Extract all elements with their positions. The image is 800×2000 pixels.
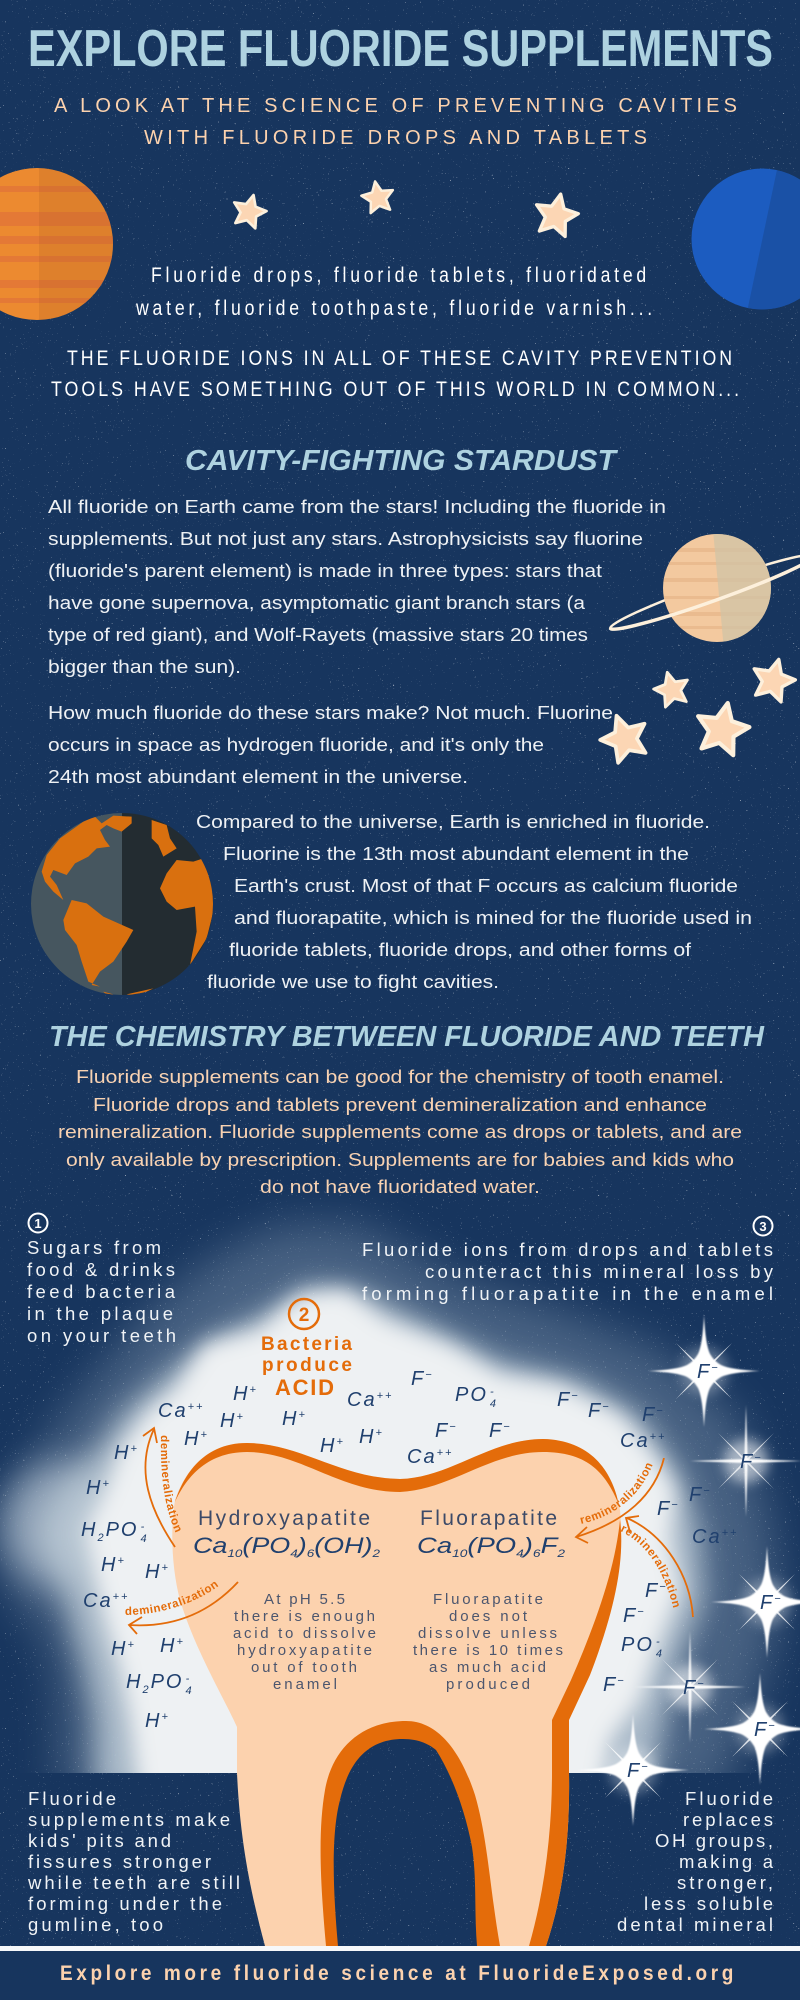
bottom right note: less soluble [644, 1893, 773, 1914]
bottom right note: stronger, [677, 1872, 773, 1893]
text block: how much fluoride [48, 702, 613, 787]
step 3: 3 [759, 1219, 767, 1234]
text block: chemistry: Fluoride supplements can be good for the chemistry of tooth enamel. [76, 1066, 724, 1087]
fluoride ions: F [642, 1404, 656, 1426]
acid ions: - [186, 1673, 191, 1685]
footer: Explore more fluoride science at FluorideExposed.org [60, 1962, 737, 1985]
acid ions: + [127, 1639, 136, 1651]
acid ions: H [320, 1435, 336, 1457]
fluoride ions: ++ [722, 1527, 738, 1539]
text block: chemistry: remineralization. Fluoride supplements come as drops or tablets, and are [58, 1121, 742, 1142]
fluoride ions: − [425, 1369, 434, 1381]
fluoride ions: F [623, 1605, 637, 1627]
acid ions: + [161, 1562, 170, 1574]
fluoride ions: PO [455, 1384, 488, 1406]
text block: stars: All fluoride on Earth came from the stars! Including the fluoride in [48, 496, 666, 517]
hydroxyapatite label [193, 1507, 380, 1560]
text block: earth: Compared to the universe, Earth is enriched in fluoride. [196, 811, 710, 832]
fluoride ions: Ca [407, 1446, 437, 1468]
sparkle stars: − [641, 1761, 650, 1773]
fluoride ions: ++ [437, 1447, 453, 1459]
hydroxyapatite label: (PO [242, 1533, 290, 1558]
step 2: 2 [299, 1305, 309, 1326]
step 2: Bacteria [261, 1334, 352, 1355]
fluoride ions: F [645, 1580, 659, 1602]
fluoride ions: − [571, 1390, 580, 1402]
hydroxyapatite label: ) [294, 1533, 307, 1558]
icon: three stars [229, 179, 581, 238]
fluoride ions: − [659, 1581, 668, 1593]
sparkle stars: F [740, 1451, 754, 1473]
sparkle stars: − [711, 1362, 720, 1374]
arrow: remineralization upper [574, 1458, 665, 1544]
acid ions: ++ [113, 1591, 129, 1603]
fluorapatite note: dissolve unless [418, 1625, 557, 1642]
fluoride ions: − [602, 1401, 611, 1413]
text block: stars: type of red giant), and Wolf-Rayets (massive stars 20 times [48, 624, 588, 645]
fluoride ions: 4 [490, 1398, 498, 1410]
hydroxyapatite note: At pH 5.5 [264, 1591, 345, 1608]
acid ions: H [101, 1554, 117, 1576]
text block: stars: have gone supernova, asymptomatic giant branch stars (a [48, 592, 586, 613]
acid ions: H [81, 1519, 97, 1541]
fluoride ions: Ca [692, 1526, 722, 1548]
acid ions: - [141, 1521, 146, 1533]
acid ions: Ca [158, 1400, 188, 1422]
enamel side [529, 1520, 621, 1946]
fluoride ions: - [656, 1636, 662, 1648]
footer [0, 1946, 800, 2000]
subtitle: A LOOK AT THE SCIENCE OF PREVENTING CAVITIES [54, 95, 737, 117]
fluoride ions: − [671, 1499, 680, 1511]
fluorapatite note: as much acid [429, 1659, 546, 1676]
step 3: forming fluorapatite in the enamel [362, 1283, 773, 1304]
step 3 [362, 1216, 774, 1304]
acid ions: + [130, 1443, 139, 1455]
text block: earth: Earth's crust. Most of that F occurs as calcium fluoride [234, 875, 738, 896]
text block: chemistry: do not have fluoridated water. [260, 1176, 540, 1197]
sparkle stars: F [627, 1760, 641, 1782]
fluoride ions: − [703, 1485, 712, 1497]
acid ions: ++ [377, 1390, 393, 1402]
acid ions: + [161, 1711, 170, 1723]
sparkle stars: F [683, 1677, 697, 1699]
fluorapatite label: F [541, 1533, 559, 1558]
fluoride ions: Ca [620, 1430, 650, 1452]
sparkle stars: − [754, 1452, 763, 1464]
fluorapatite label: 6 [533, 1548, 542, 1560]
icon: earth [30, 812, 217, 997]
text block: stars: supplements. But not just any stars. Astrophysicists say fluorine [48, 528, 643, 549]
bottom left note: supplements make [28, 1809, 230, 1830]
bottom left note: kids' pits and [28, 1830, 171, 1851]
acid ions: H [145, 1710, 161, 1732]
step 1: Sugars from [27, 1237, 161, 1258]
acid ions: + [249, 1384, 258, 1396]
fluorapatite note: Fluorapatite [433, 1591, 543, 1608]
fluoride ions: F [489, 1420, 503, 1442]
bottom right note: replaces [683, 1809, 773, 1830]
arrow: demineralization upper [142, 1426, 180, 1548]
sparkle stars: F [754, 1719, 768, 1741]
acid ions: ++ [188, 1401, 204, 1413]
sparkle stars: − [774, 1593, 783, 1605]
hydroxyapatite note: out of tooth [251, 1659, 357, 1676]
sparkle stars: − [697, 1678, 706, 1690]
fluoride ions: F [603, 1674, 617, 1696]
fluoride ions: − [503, 1421, 512, 1433]
step 1: 1 [34, 1216, 42, 1231]
text block: earth [196, 811, 752, 992]
text block: earth: and fluorapatite, which is mined for the fluoride used in [234, 907, 752, 928]
hydroxyapatite note: acid to dissolve [233, 1625, 376, 1642]
pulp gap [334, 1739, 477, 1946]
hydroxyapatite note: hydroxyapatite [237, 1642, 372, 1659]
step 2: ACID [275, 1375, 334, 1400]
bottom right note: dental mineral [617, 1914, 773, 1935]
acid ions: H [282, 1408, 298, 1430]
bottom left note: forming under the [28, 1893, 222, 1914]
fluoride ions: F [588, 1400, 602, 1422]
fluoride ions: F [557, 1389, 571, 1411]
text block: earth: fluoride we use to fight cavities. [207, 971, 499, 992]
bottom right note: Fluoride [685, 1788, 773, 1809]
icon: blue planet [690, 165, 800, 312]
intro text: water, fluoride toothpaste, fluoride varnish... [135, 297, 656, 320]
fluorapatite label: (PO [467, 1533, 516, 1558]
enamel crown [175, 1439, 619, 1505]
bottom left note: while teeth are still [27, 1872, 240, 1893]
bottom right note: making a [679, 1851, 774, 1872]
acid ions: H [160, 1635, 176, 1657]
text block: earth: fluoride tablets, fluoride drops, and other forms of [229, 939, 692, 960]
fluoride ions: - [490, 1386, 496, 1398]
intro text [135, 264, 656, 320]
acid ions: 4 [140, 1533, 149, 1545]
hydroxyapatite note [233, 1591, 376, 1693]
hydroxyapatite label: 4 [290, 1548, 298, 1560]
bottom right note: OH groups, [655, 1830, 773, 1851]
acid ions: 2 [141, 1684, 151, 1696]
fluorapatite label: 10 [452, 1548, 468, 1560]
hydroxyapatite label: 6 [307, 1548, 315, 1560]
arrow: remineralization lower: remineralization [621, 1526, 679, 1608]
bottom left note: gumline, too [28, 1914, 163, 1935]
acid ions: H [86, 1477, 102, 1499]
step 1: food & drinks [27, 1259, 175, 1280]
root arch [321, 1721, 500, 1946]
acid ions: 2 [96, 1532, 106, 1544]
acid ions: H [114, 1442, 130, 1464]
sparkle stars [577, 1315, 800, 1826]
acid ions: 4 [185, 1685, 194, 1697]
acid ions: H [145, 1561, 161, 1583]
acid ions: H [111, 1638, 127, 1660]
fluoride ions: − [637, 1606, 646, 1618]
acid ions: PO [151, 1671, 183, 1693]
text block: how much fluoride: occurs in space as hydrogen fluoride, and it's only the [48, 734, 544, 755]
fluoride ions: 4 [656, 1648, 664, 1660]
fluoride ions: F [689, 1484, 703, 1506]
arrow: demineralization upper: demineralization [160, 1436, 180, 1532]
fluoride ions: ++ [650, 1431, 666, 1443]
fluorapatite label: 2 [556, 1548, 565, 1560]
icon: four stars [594, 654, 799, 766]
acid ions: H [233, 1383, 249, 1405]
icon: ringed planet [608, 534, 800, 642]
text block: stars: bigger than the sun). [48, 656, 241, 677]
plaque cloud [0, 1225, 780, 1800]
arrow: remineralization upper: remineralization [580, 1463, 652, 1524]
sparkle stars: − [768, 1720, 777, 1732]
fluorapatite label: ) [520, 1533, 533, 1558]
fluoride ions: − [656, 1405, 665, 1417]
fluoride ions: − [617, 1675, 626, 1687]
acid ions: H [184, 1428, 200, 1450]
hydroxyapatite label: (OH) [314, 1533, 373, 1558]
intro text: Fluoride drops, fluoride tablets, fluoridated [151, 264, 650, 287]
fluoride ions: − [449, 1421, 458, 1433]
fluorapatite note [413, 1591, 563, 1693]
bottom right note [617, 1788, 774, 1935]
step 3: counteract this mineral loss by [425, 1261, 774, 1282]
acid ions: H [220, 1410, 236, 1432]
bottom left note: fissures stronger [28, 1851, 211, 1872]
step 1: feed bacteria [27, 1281, 176, 1302]
acid ions: + [375, 1427, 384, 1439]
hydroxyapatite note: enamel [273, 1676, 337, 1693]
text block: how much fluoride: 24th most abundant element in the universe. [48, 766, 468, 787]
acid ions: Ca [347, 1389, 377, 1411]
hydroxyapatite label: Hydroxyapatite [198, 1507, 370, 1530]
acid ions: + [336, 1436, 345, 1448]
text block: chemistry: Fluoride drops and tablets prevent demineralization and enhance [93, 1094, 707, 1115]
fluorapatite note: does not [449, 1608, 528, 1625]
intro callout [51, 347, 742, 401]
text block: stars [48, 496, 666, 677]
step 1: on your teeth [27, 1325, 176, 1346]
hydroxyapatite label: 2 [371, 1548, 380, 1560]
step 1 [27, 1214, 176, 1346]
arrow: demineralization lower: demineralization [125, 1582, 218, 1615]
text block: chemistry [58, 1066, 742, 1197]
fluoride ions: PO [621, 1634, 654, 1656]
acid ions: PO [106, 1519, 138, 1541]
text block: stars: (fluoride's parent element) is made in three types: stars that [48, 560, 602, 581]
fluorapatite note: there is 10 times [413, 1642, 563, 1659]
heading: cavity-fighting stardust: CAVITY-FIGHTING STARDUST [185, 445, 618, 477]
fluoride ions: F [435, 1420, 449, 1442]
acid ions: + [102, 1478, 111, 1490]
subtitle [54, 95, 737, 149]
sparkle stars: F [697, 1361, 711, 1383]
fluoride ions: F [411, 1368, 425, 1390]
heading: chemistry: THE CHEMISTRY BETWEEN FLUORIDE AND TEETH [49, 1021, 765, 1053]
step 3: Fluoride ions from drops and tablets [362, 1239, 773, 1260]
hydroxyapatite label: Ca [193, 1533, 221, 1558]
fluorapatite label: Ca [417, 1533, 445, 1558]
arrow: demineralization lower [125, 1581, 239, 1635]
acid ions: Ca [83, 1590, 113, 1612]
fluorapatite label: 4 [516, 1548, 524, 1560]
hydroxyapatite note: there is enough [234, 1608, 375, 1625]
bottom left note [27, 1788, 240, 1935]
icon: orange planet [0, 168, 120, 320]
fluoride ions: F [657, 1498, 671, 1520]
tooth [172, 1439, 621, 1946]
fluoride ions [407, 1368, 738, 1696]
step 1: in the plaque [27, 1303, 173, 1324]
bottom left note: Fluoride [28, 1788, 116, 1809]
acid ions: + [298, 1409, 307, 1421]
subtitle: WITH FLUORIDE DROPS AND TABLETS [144, 127, 647, 149]
step 2: produce [262, 1355, 352, 1376]
acid ions: + [200, 1429, 209, 1441]
sparkle stars: F [760, 1592, 774, 1614]
fluorapatite label [417, 1507, 565, 1560]
text block: how much fluoride: How much fluoride do these stars make? Not much. Fluorine [48, 702, 613, 723]
hydroxyapatite label: 10 [227, 1548, 243, 1560]
acid ions: + [117, 1555, 126, 1567]
fluorapatite label: Fluorapatite [420, 1507, 557, 1530]
acid ions: + [236, 1411, 245, 1423]
step 2 [261, 1299, 352, 1400]
fluorapatite note: produced [446, 1676, 530, 1693]
arrow: remineralization lower [621, 1515, 694, 1618]
text block: earth: Fluorine is the 13th most abundant element in the [223, 843, 689, 864]
acid ions: H [359, 1426, 375, 1448]
text block: chemistry: only available by prescription. Supplements are for babies and kids who [66, 1149, 734, 1170]
acid ions [81, 1383, 393, 1732]
acid ions: + [176, 1636, 185, 1648]
acid ions: H [126, 1671, 142, 1693]
